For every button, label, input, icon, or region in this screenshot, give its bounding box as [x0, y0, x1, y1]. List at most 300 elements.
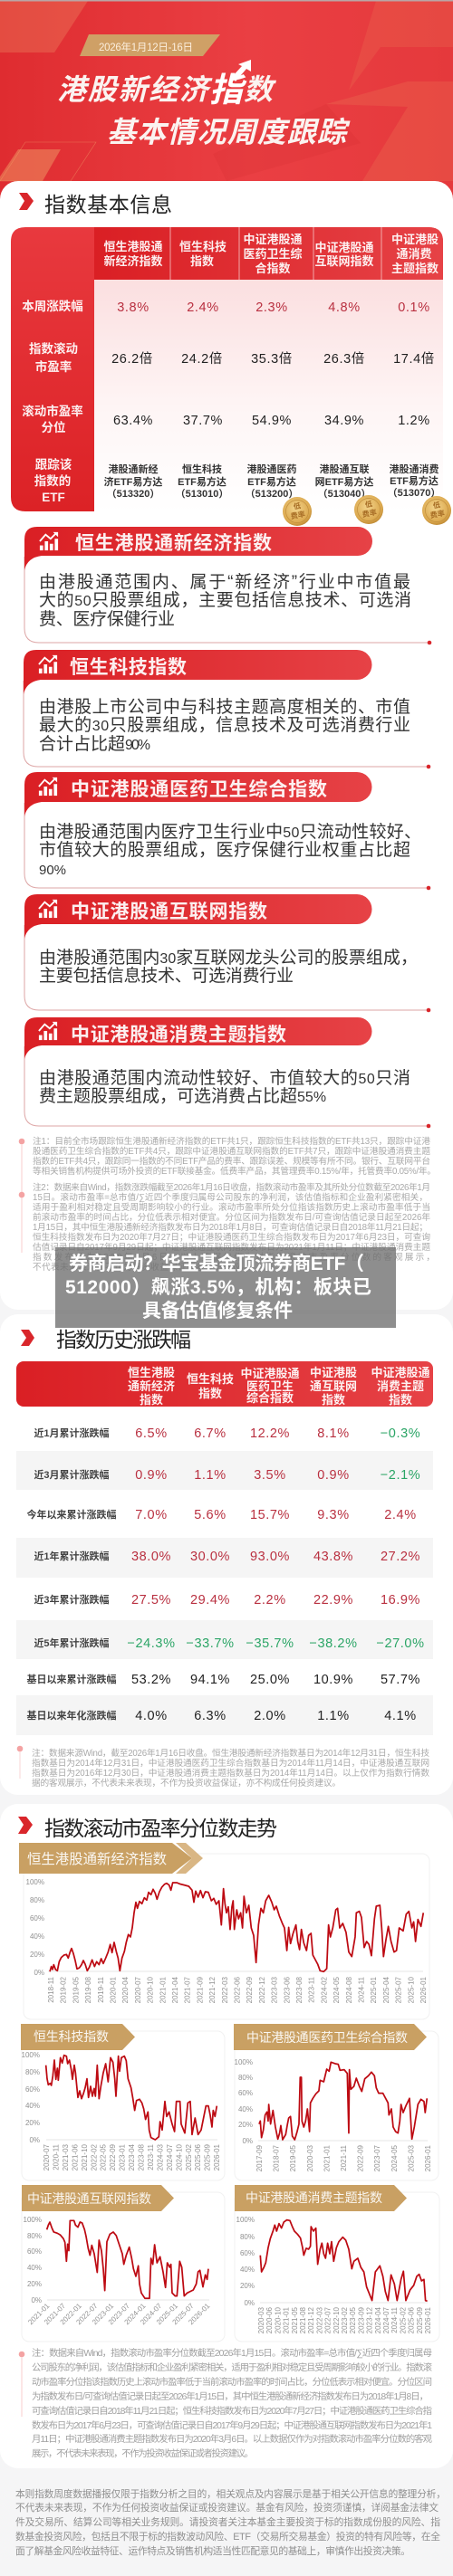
- row: since base date annualised: [27, 1709, 417, 1723]
- description text: 由港股通范围内、属于“新经济”行业中市值最: [39, 572, 410, 592]
- table: index basics: [11, 227, 443, 511]
- y axis labels: 0%: [31, 2296, 42, 2304]
- x axis labels: 2024-05: [333, 1976, 341, 2003]
- weekly change values: 2.3%: [255, 301, 288, 315]
- y axis labels: 40%: [238, 2105, 253, 2113]
- x axis labels: 2024-05: [390, 2144, 399, 2171]
- row: year to date: 2.4%: [384, 1508, 417, 1522]
- x axis labels: 2020-10: [147, 1976, 155, 2003]
- x axis labels: 2018-11: [47, 1976, 55, 2003]
- x axis labels: 2025-01: [370, 1976, 378, 2003]
- tracking ETF names: 港股通医药: [246, 463, 297, 475]
- x axis labels: 2022-03: [221, 1976, 229, 2003]
- y axis labels: 60%: [240, 2249, 255, 2257]
- panel: CSI Stock Connect consumer theme index: 中证港股通消费主题指数: [71, 1025, 286, 1045]
- y axis labels: 20%: [240, 2282, 255, 2290]
- tracking ETF names: （513200）: [246, 488, 298, 500]
- title: 指: [209, 72, 247, 109]
- PE percentile values: 34.9%: [324, 414, 364, 428]
- y axis labels: 40%: [25, 2102, 40, 2110]
- tracking ETF names: 网ETF易方达: [315, 475, 373, 488]
- y axis labels: 100%: [235, 2058, 253, 2066]
- footnote 2: 15日。滚动市盈率=总市值/∑近四个季度归属母公司股东的净利润，该估值指标和企业盈利紧密相关，: [33, 1191, 428, 1203]
- x axis labels: 2025-02: [399, 2306, 407, 2333]
- panel: Hang Seng Tech index: 恒生科技指数: [70, 657, 187, 678]
- title: 港股新经济: [57, 73, 213, 106]
- x axis labels: 2025-06: [194, 2143, 202, 2171]
- icon: section chevron: [18, 1817, 33, 1834]
- row: 5 years: −38.2%: [309, 1636, 358, 1651]
- x axis labels: 2019-08: [84, 1976, 92, 2003]
- chart: Hang Seng Stock Connect new economy: 恒生港股通新经济指数: [27, 1851, 167, 1867]
- footnote 1: 股通医药卫生综合指数的ETF共4只，跟踪中证港股通互联网指数的ETF共7只，跟踪中证港股通消费主题: [33, 1145, 430, 1157]
- row: 3 months: 1.1%: [194, 1468, 226, 1483]
- description text: [39, 822, 421, 878]
- x axis labels: 2023-01: [91, 2302, 116, 2326]
- x axis labels: 2025-01: [155, 2302, 179, 2326]
- overlay: news headline box: 512000）飙涨3.5%，机构：板块已: [65, 1277, 371, 1298]
- x axis labels: 2021-07: [184, 1976, 192, 2003]
- table column headers: 主题指数: [391, 262, 439, 275]
- rolling PE values: 24.2倍: [181, 351, 223, 367]
- tracking ETF names: 港股通消费: [390, 463, 439, 475]
- footnote 2: 适用于盈利相对稳定且受周期影响较小的行业。滚动市盈率所处分位指该指数历史上滚动市盈率低于当: [33, 1201, 430, 1213]
- footnote 2: 恒生科技指数发布日为2020年7月27日；中证港股通医药卫生综合指数发布日为2017年6月23日，可查询: [33, 1231, 430, 1243]
- footnote: PE percentile: 数发布日为2017年6月23日，可查询估值记录日自2017年9月29日起；中证港股通互联网指数发布日为2021年1: [32, 2419, 432, 2431]
- chart: CSI healthcare: [234, 2024, 439, 2180]
- tracking ETF names: 港股通互联: [319, 463, 370, 475]
- x axis labels: 2021-12: [208, 1976, 217, 2003]
- row: year to date: 9.3%: [317, 1508, 350, 1522]
- icon: low fee seal 2: [354, 495, 383, 524]
- y axis labels: 40%: [27, 2264, 42, 2272]
- table column headers: 恒生科技: [179, 240, 226, 253]
- x axis labels: 2025-04: [382, 1976, 390, 2003]
- footnote: PE percentile: 注：数据来自Wind，指数滚动市盈率分位数截至2026年1月15日。滚动市盈率=总市值/∑近四个季度归属母: [32, 2347, 432, 2359]
- row: year to date: 15.7%: [250, 1508, 290, 1522]
- footnote 2: 前滚动市盈率的时间占比，分位低表示相对便宜。分位区间为指数发布日/可查询估值记录日起至2026年: [33, 1211, 430, 1223]
- row: since base date cumulative: 25.0%: [250, 1673, 290, 1687]
- x axis labels: [26, 2302, 212, 2326]
- x axis labels: 2025-09: [204, 2143, 212, 2171]
- row: 5 years: −33.7%: [186, 1636, 235, 1651]
- tracking ETF names: 恒生科技: [182, 463, 222, 475]
- table row labels: 本周涨跌幅: [22, 299, 83, 313]
- x axis labels: 2022-02: [90, 2143, 98, 2171]
- footnote: PE percentile: 公司股东的净利润，该估值指标和企业盈利紧密相关，适用于盈利相对稳定且受周期影响较小的行业。指数滚: [32, 2361, 433, 2373]
- disclaimer footer: 本则指数周度数据播报仅限于指数分析之目的，相关观点及内容展示是基于相关公开信息的整理分析，: [15, 2487, 446, 2500]
- data line: [50, 1883, 423, 1971]
- tracking ETF names: ETF易方达: [390, 474, 439, 487]
- date badge: 2026年1月12日-16日: [99, 41, 193, 53]
- header banner: [0, 0, 453, 218]
- y axis labels: 0%: [29, 2136, 40, 2144]
- table header row: 指数: [198, 1387, 222, 1400]
- icon: low fee seal 3: 费率: [429, 509, 445, 520]
- row: 1 year: 43.8%: [313, 1550, 353, 1564]
- footnote 1: 指数的ETF共4只，跟踪同一指数的不同ETF产品的费率、跟踪误差、规模等有所不同。银行、互联网平台: [33, 1155, 430, 1167]
- row: 1 month: −0.3%: [381, 1426, 420, 1441]
- rolling PE values: 35.3倍: [251, 351, 293, 367]
- table header row: 中证港股通: [371, 1366, 430, 1379]
- chart: CSI internet: 中证港股通互联网指数: [27, 2191, 151, 2206]
- x axis labels: 2024-02: [320, 1976, 328, 2003]
- disclaimer footer: 件及交易所、结算公司等相关业务规则。请投资者关注本基金主要投资于标的指数成份股的风险、指: [15, 2515, 440, 2528]
- title: 基本情况周度跟踪: [107, 116, 351, 148]
- row: 3 months: 0.9%: [317, 1468, 350, 1483]
- x axis labels: 2026-01: [424, 2306, 432, 2333]
- table: historical returns: [16, 1361, 433, 1735]
- tracking ETF names: （513320）: [107, 488, 159, 500]
- rolling PE values: 26.3倍: [323, 351, 365, 367]
- x axis labels: 2026-01: [419, 1976, 428, 2003]
- footnote: historical returns: [17, 1746, 429, 1789]
- row: 1 year: 近1年累计涨跌幅: [34, 1550, 110, 1562]
- x axis labels: 2021-01: [26, 2302, 52, 2326]
- table column headers: 中证港股: [391, 233, 439, 246]
- y axis labels: 100%: [236, 2216, 255, 2224]
- row: since base date annualised: 4.0%: [135, 1709, 168, 1723]
- x axis labels: 2022-03: [315, 2306, 323, 2333]
- y axis labels: [235, 2058, 253, 2145]
- chart: CSI healthcare: 中证港股通医药卫生综合指数: [246, 2030, 408, 2045]
- table header row: 指数: [389, 1393, 412, 1407]
- table column headers: 指数: [190, 254, 214, 268]
- y axis labels: 40%: [30, 1932, 44, 1941]
- y axis labels: 0%: [34, 1969, 44, 1977]
- title: 数: [244, 73, 277, 106]
- x axis labels: 2023-04: [128, 2143, 136, 2171]
- weekly change values: [117, 301, 430, 315]
- data line: [260, 2220, 428, 2301]
- overlay: news headline box: 券商启动？华宝基金顶流券商ETF（: [69, 1253, 364, 1274]
- icon: low fee seal 3: 低: [432, 500, 441, 510]
- panel: PE percentile trend card: [0, 1804, 453, 2468]
- y axis labels: [24, 2216, 42, 2304]
- table row labels: 分位: [42, 420, 65, 434]
- chart: Hang Seng Stock Connect new economy: [19, 1843, 429, 2019]
- x axis labels: 2024-11: [357, 1976, 366, 2003]
- x axis labels: 2021-06: [71, 2143, 79, 2171]
- y axis labels: 0%: [244, 2299, 255, 2307]
- data line: [259, 2062, 427, 2140]
- footnote: PE percentile: 为指数发布日/可查询估值记录日起至2026年1月15日，其中恒生港股通新经济指数发布日为2018年1月8日，: [32, 2390, 429, 2402]
- overlay: news headline box: 具备估值修复条件: [142, 1301, 293, 1321]
- x axis labels: 2023-07: [373, 2144, 381, 2171]
- x axis labels: 2022-01: [59, 2302, 83, 2326]
- row: since base date cumulative: 53.2%: [131, 1673, 171, 1687]
- table header row: 通新经济: [128, 1379, 175, 1393]
- footnote 1: [19, 1135, 436, 1253]
- icon: low fee seal 2: 费率: [361, 508, 377, 519]
- x axis labels: 2020-06: [265, 2306, 274, 2333]
- row: 3 years: 27.5%: [131, 1593, 171, 1608]
- weekly change values: 4.8%: [328, 301, 361, 315]
- x axis labels: 2022-07: [74, 2302, 100, 2326]
- y axis labels: 100%: [26, 1878, 44, 1886]
- x axis labels: 2026-01: [213, 2143, 221, 2171]
- data line: [47, 2220, 208, 2298]
- tracking ETF names: 济ETF易方达: [104, 475, 162, 488]
- table column headers: 合指数: [255, 262, 291, 275]
- y axis labels: 80%: [240, 2233, 255, 2241]
- x axis labels: 2025-03: [407, 2144, 415, 2171]
- row: 1 month: 近1月累计涨跌幅: [34, 1426, 110, 1439]
- y axis labels: 20%: [25, 2119, 40, 2127]
- footnote: historical returns: 指数基日为2016年12月30日，中证港股通消费主题指数基日为2014年11月14日。以上仅作为指数行情数: [32, 1767, 429, 1779]
- row: 3 years: 22.9%: [313, 1593, 353, 1608]
- x axis labels: 2025-10: [407, 1976, 415, 2003]
- panel: historical returns card: [0, 1314, 453, 1795]
- x axis labels: 2024-03: [156, 2143, 164, 2171]
- y axis labels: 20%: [30, 1951, 44, 1959]
- disclaimer footer: 不代表未来表现，不作为任何投资收益保证或投资建议。基金有风险，投资须谨慎，详阅基金法律文: [15, 2501, 439, 2514]
- x axis labels: 2023-03: [271, 1976, 279, 2003]
- x axis labels: 2024-08: [345, 1976, 353, 2003]
- description text: [39, 697, 410, 754]
- description text: 最大的30只股票组成，信息技术及可选消费行业: [39, 715, 410, 735]
- row: 5 years: −35.7%: [246, 1636, 294, 1651]
- x axis labels: 2024-04: [374, 2306, 382, 2333]
- x axis labels: 2021-09: [196, 1976, 204, 2003]
- panel: Hang Seng Tech index: [24, 650, 430, 768]
- row: 3 months: 3.5%: [254, 1468, 286, 1483]
- x axis labels: 2021-08: [299, 2306, 307, 2333]
- table row labels: ETF: [42, 491, 65, 504]
- description text: 费、医疗保健行业: [39, 609, 175, 629]
- tracking ETF names: （513010）: [176, 488, 228, 500]
- row: 1 year: 38.0%: [131, 1550, 171, 1564]
- panel: CSI Stock Connect healthcare index: 中证港股通医药卫生综合指数: [71, 779, 327, 800]
- y axis labels: 40%: [240, 2266, 255, 2274]
- row: year to date: 7.0%: [135, 1508, 168, 1522]
- x axis labels: 2020-10: [274, 2306, 282, 2333]
- x axis labels: 2022-06: [234, 1976, 241, 2003]
- x axis labels: 2025-09: [416, 2306, 424, 2333]
- PE percentile values: 63.4%: [113, 414, 153, 428]
- rolling PE values: 17.4倍: [393, 351, 435, 367]
- description text: [39, 948, 418, 986]
- y axis labels: 20%: [27, 2280, 42, 2288]
- y axis labels: 60%: [238, 2089, 253, 2097]
- x axis labels: 2022-09: [109, 2143, 117, 2171]
- x axis labels: 2022-05: [100, 2143, 108, 2171]
- footnote: historical returns: 据的客观展示，不代表未来表现，不作为投资收益保证，亦不构成任何投资建议。: [32, 1777, 341, 1789]
- x axis labels: 2025-02: [185, 2143, 193, 2171]
- y axis labels: 60%: [25, 2085, 40, 2094]
- table header row: 恒生港股: [128, 1366, 175, 1379]
- row: year to date: 今年以来累计涨跌幅: [27, 1508, 116, 1521]
- description text: 大的50只股票组成，主要包括信息技术、可选消: [39, 590, 411, 610]
- x axis labels: [255, 2144, 432, 2171]
- x axis labels: 2022-07: [324, 2306, 333, 2333]
- panel: index basics card: [0, 181, 453, 1310]
- row: 3 years: 近3年累计涨跌幅: [34, 1593, 110, 1606]
- x axis labels: 2022-09: [357, 2144, 365, 2171]
- y axis labels: 0%: [242, 2137, 253, 2145]
- row: year to date: [27, 1508, 417, 1522]
- icon: low fee seal 1: 费率: [290, 510, 305, 520]
- x axis labels: 2020-07: [43, 2143, 51, 2171]
- title: [57, 60, 351, 148]
- table header row: 中证港股: [310, 1366, 357, 1379]
- table row labels: 指数的: [34, 473, 71, 488]
- footnote: historical returns: 注：数据来源Wind，截至2026年1月16日收盘。恒生港股通新经济指数基日为2014年12月31日，恒生科技: [32, 1747, 429, 1759]
- row: 5 years: [34, 1636, 425, 1651]
- x axis labels: 2024-07: [166, 2143, 174, 2171]
- weekly change values: 3.8%: [117, 301, 149, 315]
- footnote 1: 注1：目前全市场跟踪恒生港股通新经济指数的ETF共1只，跟踪恒生科技指数的ETF共13只，跟踪中证港: [33, 1135, 430, 1147]
- x axis labels: 2024-01: [122, 2302, 148, 2326]
- row: 1 month: 8.1%: [317, 1426, 350, 1441]
- x axis labels: 2021-07: [43, 2302, 68, 2326]
- y axis labels: 20%: [238, 2121, 253, 2129]
- footnote 2: 不代表未来表现，不作为投资收益保证或者投资建议。: [33, 1261, 250, 1273]
- table row labels: [22, 299, 83, 504]
- x axis labels: 2021-01: [323, 2144, 331, 2171]
- y axis labels: 100%: [24, 2216, 42, 2224]
- icon: low fee seal 2: 低: [364, 499, 373, 510]
- description text: 费主题股票组成，可选消费占比超55%: [39, 1086, 326, 1106]
- y axis labels: 80%: [25, 2068, 40, 2076]
- x axis labels: 2020-03: [306, 2144, 314, 2171]
- table header row: 医药卫生: [246, 1379, 294, 1393]
- row: 3 months: [34, 1468, 420, 1483]
- x axis labels: 2023-12: [366, 2306, 374, 2333]
- row: 5 years: 近5年累计涨跌幅: [34, 1636, 110, 1649]
- row: 3 months: 近3月累计涨跌幅: [34, 1468, 110, 1481]
- row: 1 month: 6.5%: [135, 1426, 168, 1441]
- x axis labels: 2019-02: [60, 1976, 68, 2003]
- rolling PE values: [111, 351, 435, 367]
- x axis labels: 2025-06: [408, 2306, 416, 2333]
- x axis labels: 2024-11: [390, 2306, 399, 2333]
- y axis labels: 80%: [27, 2232, 42, 2240]
- x axis labels: 2023-08: [295, 1976, 304, 2003]
- x axis labels: 2026-01: [424, 2144, 432, 2171]
- x axis labels: 2023-06: [283, 1976, 291, 2003]
- row: 3 years: 29.4%: [190, 1593, 230, 1608]
- x axis labels: 2021-04: [171, 1976, 179, 2003]
- x axis labels: 2018-07: [273, 2144, 281, 2171]
- row: since base date annualised: 基日以来年化涨跌幅: [27, 1709, 116, 1722]
- icon: section chevron: [19, 193, 34, 210]
- footnote 2: 指数发布日为2020年3月6日。以上数据仅作为对指数滚动市盈率分位数的客观展示，: [33, 1251, 435, 1263]
- table column headers: 通消费: [396, 247, 432, 261]
- x axis labels: 2022-10: [333, 2306, 341, 2333]
- row: 1 month: 6.7%: [194, 1426, 226, 1441]
- y axis labels: [236, 2216, 255, 2307]
- y axis labels: 60%: [30, 1914, 44, 1922]
- x axis labels: 2021-01: [283, 2306, 291, 2333]
- description text: 由港股通范围内30家互联网龙头公司的股票组成，: [39, 948, 418, 968]
- tracking ETF names: （513070）: [388, 487, 440, 499]
- data line: [46, 2056, 217, 2140]
- heading: index basics: 指数基本信息: [44, 193, 172, 216]
- x axis labels: 2024-10: [175, 2143, 183, 2171]
- chart: CSI consumer theme: 中证港股通消费主题指数: [246, 2190, 382, 2205]
- panel: CSI Stock Connect internet index: [24, 894, 430, 1012]
- table row labels: 滚动市盈率: [22, 404, 83, 418]
- PE percentile values: [113, 414, 430, 428]
- panel: CSI Stock Connect consumer theme index: [24, 1017, 430, 1128]
- table column headers: [103, 233, 439, 275]
- y axis labels: [22, 2051, 40, 2144]
- description text: 由港股通范围内流动性较好、市值较大的50只消: [39, 1068, 410, 1088]
- x axis labels: 2019-05: [72, 1976, 80, 2003]
- x axis labels: 2021-03: [62, 2143, 70, 2171]
- row: since base date cumulative: 57.7%: [381, 1673, 420, 1687]
- PE percentile values: 1.2%: [398, 414, 430, 428]
- x axis labels: 2021-05: [291, 2306, 299, 2333]
- x axis labels: 2021-01: [159, 1976, 167, 2003]
- x axis labels: 2022-12: [258, 1976, 266, 2003]
- icon: low fee seal 1: [283, 497, 312, 526]
- x axis labels: 2020-07: [134, 1976, 142, 2003]
- table row labels: 跟踪该: [35, 457, 72, 472]
- footnote 2: [33, 1181, 435, 1273]
- panel: Hang Seng Stock Connect new economy index: [24, 527, 431, 644]
- description text: 由港股上市公司中与科技主题高度相关的、市值: [39, 697, 410, 717]
- PE percentile values: 37.7%: [183, 414, 223, 428]
- x axis labels: 2022-09: [246, 1976, 254, 2003]
- footnote: PE percentile: 月11日；中证港股通消费主题指数发布日为2020年3月6日。以上数据仅作为对指数滚动市盈率分位数的客观: [32, 2433, 433, 2445]
- chart: CSI consumer theme: [235, 2185, 439, 2342]
- chart: Hang Seng Tech: [21, 2024, 225, 2180]
- x axis labels: [47, 1976, 428, 2003]
- footnote 1: 等相关销售机构提供可场外投资的ETF联接基金。低费率产品，其管理费率0.15%/年，托管费率0.05%/年。: [33, 1165, 436, 1177]
- x axis labels: 2023-11: [147, 2143, 155, 2171]
- x axis labels: 2023-07: [107, 2302, 131, 2326]
- y axis labels: 80%: [238, 2074, 253, 2082]
- disclaimer footer: 数基金投资风险，包括且不限于标的指数波动风险、ETF（交易所交易基金）投资的特有风险等，在全: [15, 2530, 440, 2543]
- footnote: PE percentile: 动市盈率分位指该指数历史上滚动市盈率低于当前滚动市盈率的时间占比，分位低表示相对便宜。分位区间: [32, 2376, 432, 2388]
- y axis labels: 80%: [30, 1896, 44, 1904]
- tracking ETF names: （513040）: [318, 488, 371, 500]
- x axis labels: 2025-07: [395, 1976, 403, 2003]
- footnote: PE percentile: 可查询估值记录日自2018年11月21日起；恒生科技指数发布日为2020年7月27日；中证港股通医药卫生综合指: [32, 2405, 432, 2417]
- rolling PE values: 26.2倍: [111, 351, 153, 367]
- footnote 2: 1月15日，其中恒生港股通新经济指数发布日为2018年1月8日，可查询估值记录日自2018年11月21日起；: [33, 1221, 428, 1233]
- row: 1 year: [34, 1550, 420, 1564]
- row: 1 month: [34, 1426, 420, 1441]
- table header row: 中证港股通: [240, 1367, 300, 1380]
- description text: 合计占比超90%: [39, 734, 150, 754]
- y axis labels: 100%: [22, 2051, 40, 2059]
- icon: low fee seal 1: 低: [293, 501, 302, 511]
- row: 3 years: 16.9%: [381, 1593, 420, 1608]
- description text: 由港股通范围内医疗卫生行业中50只流动性较好、: [39, 822, 421, 842]
- table column headers: 恒生港股通: [103, 240, 163, 253]
- date badge: [80, 34, 220, 56]
- x axis labels: 2020-01: [109, 1976, 118, 2003]
- chart: CSI internet: [22, 2185, 225, 2342]
- x axis labels: 2019-11: [97, 1976, 105, 2003]
- table header row: [16, 1361, 433, 1407]
- x axis labels: 2021-12: [307, 2306, 315, 2333]
- description text: [39, 1068, 410, 1106]
- tracking ETF names: ETF易方达: [178, 475, 226, 488]
- x axis labels: 2021-10: [81, 2143, 89, 2171]
- row: 1 month: 12.2%: [250, 1426, 290, 1441]
- table row labels: 指数滚动: [29, 341, 78, 356]
- row: 1 year: 93.0%: [250, 1550, 290, 1564]
- x axis labels: 2023-02: [341, 2306, 349, 2333]
- x axis labels: 2023-08: [138, 2143, 145, 2171]
- table column headers: 中证港股通: [314, 241, 374, 254]
- description text: 市值较大的股票组成，医疗保健行业权重占比超: [39, 840, 410, 860]
- x axis labels: 2024-07: [382, 2306, 390, 2333]
